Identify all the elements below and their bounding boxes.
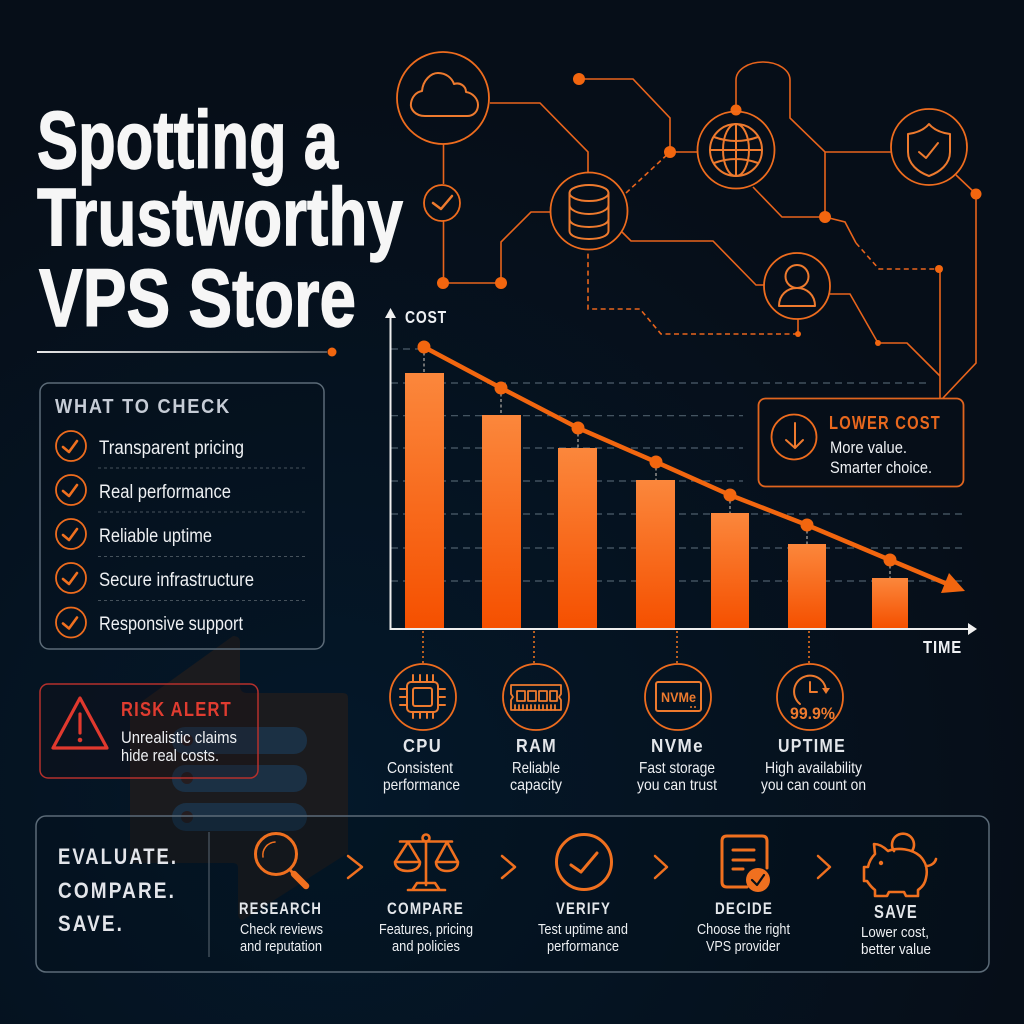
arrow: research to compare: [348, 856, 362, 878]
lower cost text: Smarter choice.: [830, 458, 932, 477]
title: Trustworthy: [37, 172, 403, 263]
step: compare: COMPARE: [387, 899, 464, 918]
step: save: better value: [861, 941, 931, 958]
icon: down arrow: [772, 414, 816, 460]
lower cost text: [830, 438, 932, 477]
spec: RAM: capacity: [510, 777, 562, 794]
icon: user: [764, 253, 830, 319]
spec: uptime: High availability: [765, 760, 862, 777]
step: verify: VERIFY: [556, 899, 611, 918]
step: save: SAVE: [874, 902, 918, 922]
chart gridlines: [391, 349, 966, 581]
spec: NVMe: you can trust: [637, 777, 717, 794]
step: verify: [538, 834, 628, 955]
step: decide: VPS provider: [706, 938, 780, 955]
step: decide: [697, 836, 791, 955]
risk alert text: hide real costs.: [121, 747, 219, 765]
icon: shield: [891, 109, 967, 185]
spec: uptime: you can count on: [761, 777, 866, 794]
spec: RAM: Reliable: [512, 760, 560, 777]
connector lines: [444, 62, 976, 398]
spec: NVMe: [637, 664, 717, 794]
spec: RAM: RAM: [516, 735, 557, 756]
icon: memory module: [503, 664, 569, 730]
slogan: EVALUATE.: [58, 844, 178, 869]
step: save: [861, 834, 936, 958]
lower cost heading: LOWER COST: [829, 412, 941, 433]
icon: balance scale: [395, 834, 458, 890]
icon: globe: [698, 112, 774, 188]
bar chart: cost over time: [385, 307, 977, 657]
connector nodes: [437, 73, 982, 346]
callout: risk alert: [40, 684, 258, 778]
spec: uptime: UPTIME: [778, 735, 846, 756]
step: research: [239, 834, 323, 955]
icon: clock 99.9%: 99.9%: [790, 705, 835, 723]
title: [37, 95, 403, 344]
risk alert text: Unrealistic claims: [121, 729, 237, 747]
arrow: decide to save: [818, 856, 830, 878]
cost trend line: [418, 340, 965, 593]
spec: CPU: performance: [383, 777, 460, 794]
slogan: COMPARE.: [58, 878, 176, 903]
icon: small check: [424, 185, 460, 221]
icon: document with badge: [722, 836, 770, 892]
icon: magnifier: [256, 834, 306, 886]
spec: NVMe: NVMe: [651, 735, 704, 756]
title rule with dot: [37, 348, 336, 356]
bar leader lines: [424, 347, 890, 578]
check item: transparent pricing: [56, 431, 244, 461]
icon: database: [550, 172, 628, 250]
chart axes: [385, 308, 977, 635]
icon: chip: [390, 664, 456, 730]
step: compare: and policies: [392, 938, 460, 955]
title: VPS Store: [39, 253, 356, 344]
spec: CPU: Consistent: [387, 760, 453, 777]
spec: CPU: CPU: [403, 735, 442, 756]
title: Spotting a: [37, 95, 339, 186]
icon: warning triangle: [53, 698, 107, 748]
step: research: Check reviews: [240, 921, 323, 938]
check item: reliable uptime: [56, 519, 212, 549]
arrow: compare to verify: [502, 856, 515, 878]
axis label: cost: COST: [405, 307, 447, 327]
step: verify: performance: [547, 938, 619, 955]
panel: process: [36, 816, 989, 972]
bars: [405, 373, 908, 628]
spec leaders: [423, 631, 809, 664]
callout: lower cost: [758, 398, 964, 486]
step: decide: DECIDE: [715, 899, 773, 918]
risk alert text: [121, 729, 237, 765]
risk alert heading: RISK ALERT: [121, 699, 232, 721]
check item: reliable uptime: Reliable uptime: [99, 526, 212, 547]
step: decide: Choose the right: [697, 921, 791, 938]
spec: uptime: [761, 664, 866, 794]
check item: secure infrastructure: Secure infrastructure: [99, 570, 254, 591]
watermark: ghost server shape: [130, 636, 348, 920]
arrow: verify to decide: [655, 856, 667, 878]
icon: NVMe drive: NVMe: [661, 689, 696, 705]
slogan: SAVE.: [58, 911, 124, 936]
piggy eye: [879, 861, 883, 865]
step: save: Lower cost,: [861, 924, 929, 941]
check item: real performance: [56, 475, 231, 505]
check item: real performance: Real performance: [99, 482, 231, 503]
step: research: and reputation: [240, 938, 322, 955]
spec: CPU: [383, 664, 460, 794]
network diagram: [397, 52, 982, 398]
step: verify: Test uptime and: [538, 921, 628, 938]
icon: cloud: [397, 52, 489, 144]
check item: transparent pricing: Transparent pricing: [99, 438, 244, 459]
step: compare: Features, pricing: [379, 921, 473, 938]
slogan: [58, 844, 178, 936]
step: research: RESEARCH: [239, 899, 322, 918]
check item: responsive support: [56, 608, 244, 638]
spec: RAM: [503, 664, 569, 794]
icon: check circle: [556, 834, 612, 890]
heading: what to check: WHAT TO CHECK: [55, 395, 231, 418]
panel: what to check: [40, 383, 324, 649]
check item: secure infrastructure: [56, 563, 254, 593]
step: compare: [379, 834, 473, 955]
icon: piggy bank: [864, 834, 936, 896]
spec: NVMe: Fast storage: [639, 760, 715, 777]
check item: responsive support: Responsive support: [99, 614, 244, 635]
axis label: time: TIME: [923, 637, 962, 657]
lower cost text: More value.: [830, 438, 907, 457]
